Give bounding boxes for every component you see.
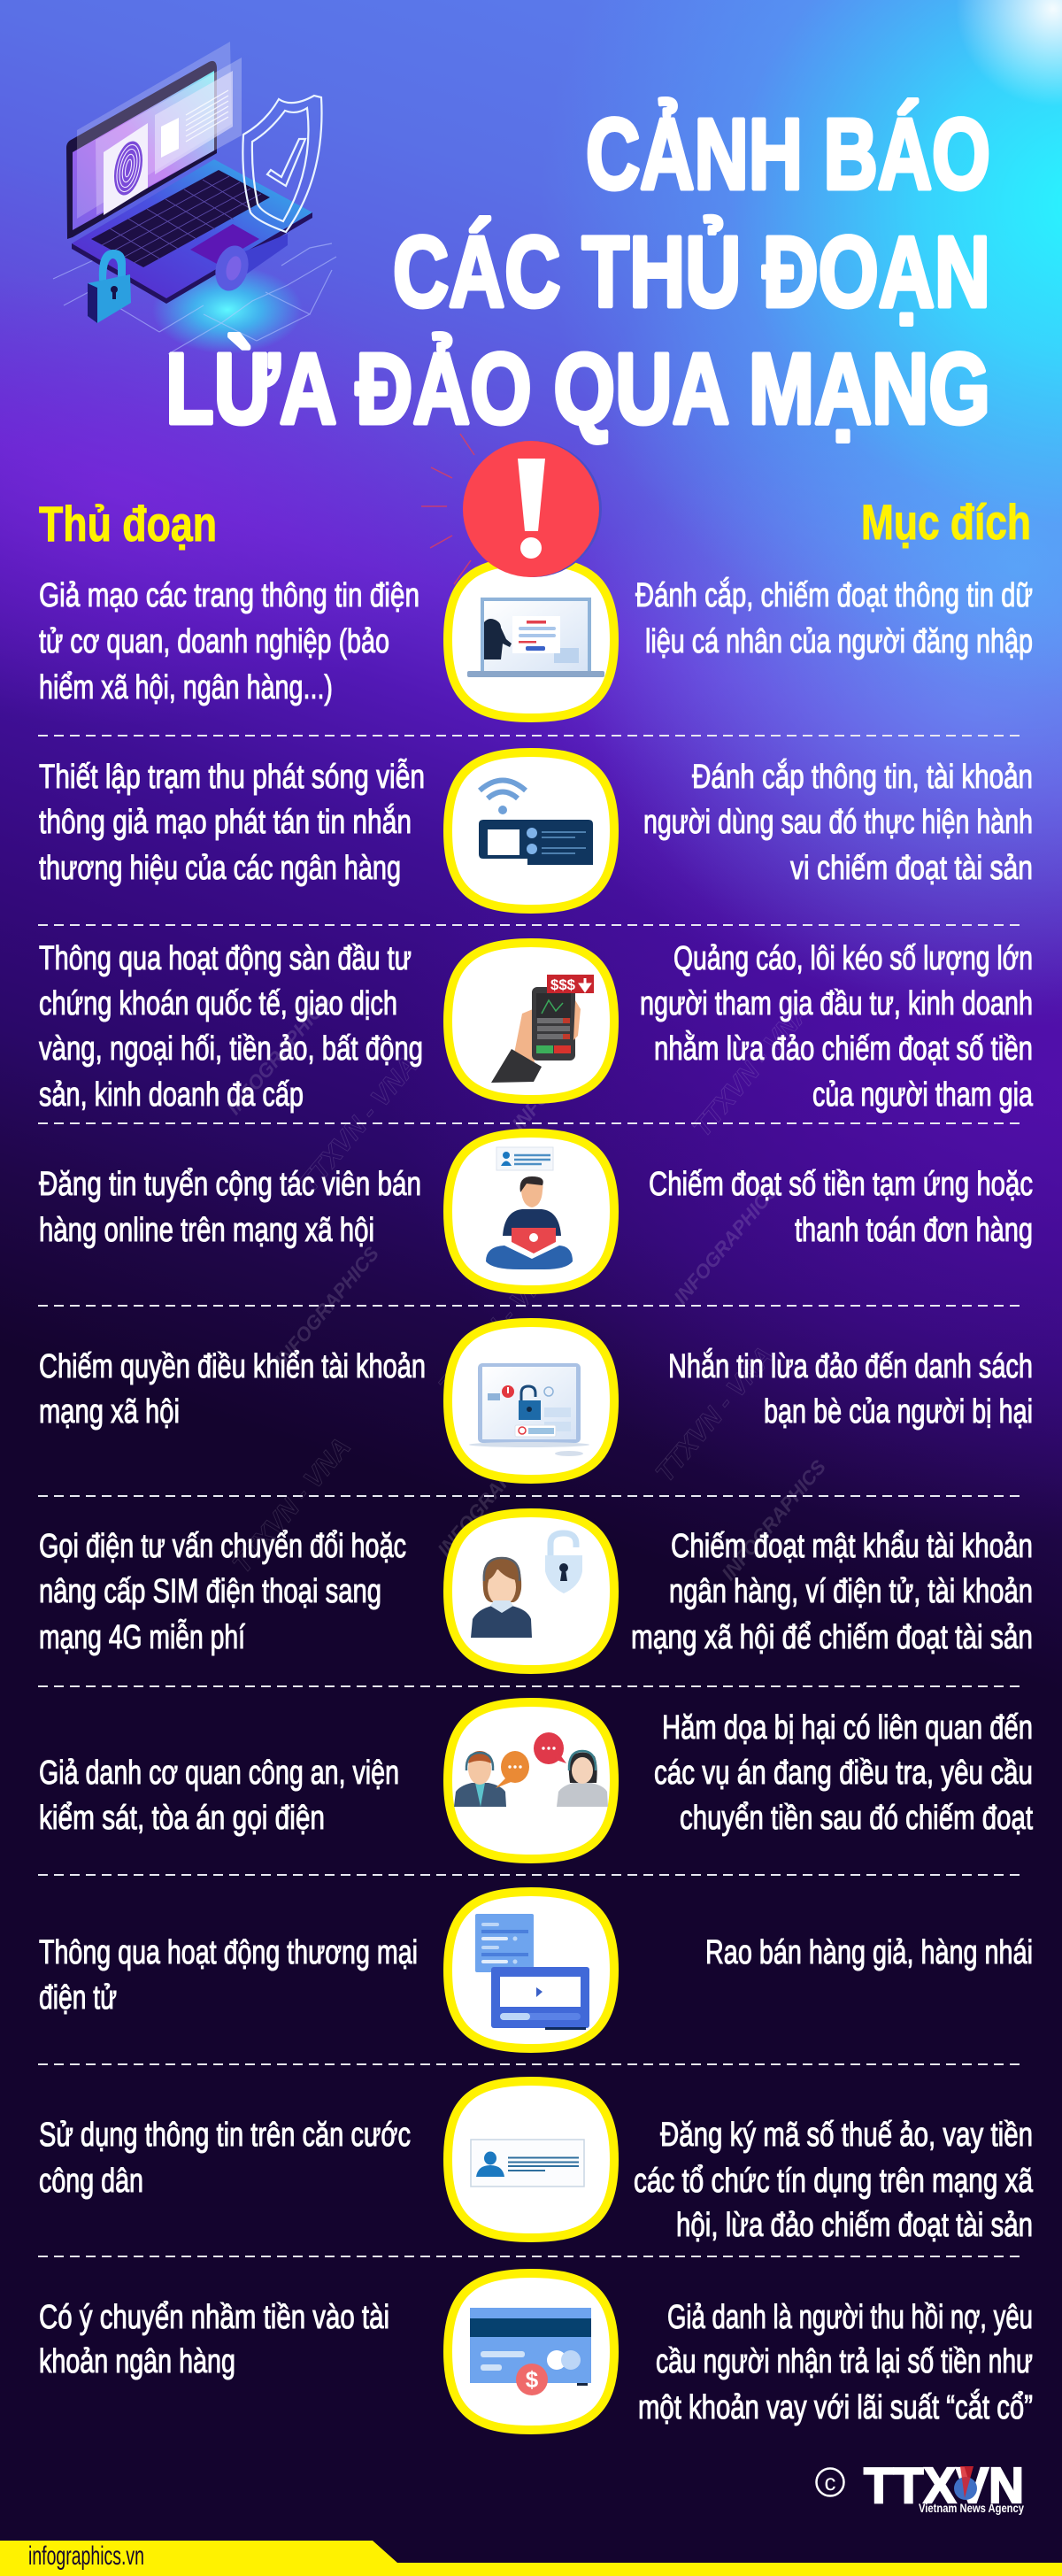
row 2 [39, 752, 1033, 909]
row 5 method [39, 1348, 426, 1431]
row 2 method: thông giả mạo phát tán tin nhắn [39, 803, 412, 841]
row 8 pill icon: e-commerce panels [448, 1892, 614, 2048]
row 8 method [39, 1934, 418, 2017]
logo: TTXVN: TTXVN [864, 2457, 1024, 2514]
row 1 purpose [635, 576, 1033, 660]
row 4 method: hàng online trên mạng xã hội [39, 1212, 374, 1249]
key [232, 234, 288, 276]
row 10 method [39, 2299, 389, 2380]
row 3 method: vàng, ngoại hối, tiền ảo, bất động [39, 1030, 423, 1068]
footer band: infographics.vn [28, 2541, 144, 2571]
row 4 method [39, 1166, 421, 1249]
row 10 pill icon: bank card with coin [448, 2273, 614, 2430]
row 9 method [39, 2117, 411, 2200]
row 1 pill icon: phishing login [448, 561, 614, 718]
watermarks: INFOGRAPHICS [270, 1242, 383, 1371]
watermarks: INFOGRAPHICS [222, 990, 335, 1119]
padlock [99, 250, 126, 282]
row 1 method: Giả mạo các trang thông tin điện [39, 577, 419, 614]
row 3 [39, 940, 1034, 1114]
trackpad [190, 224, 259, 264]
row 8 [39, 1892, 1033, 2048]
alert icon [421, 434, 602, 584]
watermarks: INFOGRAPHICS [669, 1179, 782, 1308]
row 2 purpose [643, 758, 1033, 887]
document [161, 118, 179, 158]
row 6 method: Gọi điện tư vấn chuyển đổi hoặc [39, 1528, 406, 1565]
row 2 method: Thiết lập trạm thu phát sóng viễn [39, 758, 425, 796]
laptop base [72, 159, 312, 298]
row 7 [39, 1702, 1033, 1859]
row 4 purpose [649, 1166, 1033, 1249]
row 3 purpose [640, 940, 1034, 1114]
logo: TTXVN: Vietnam News Agency [919, 2501, 1024, 2515]
watermarks: INFOGRAPHICS [717, 1455, 830, 1585]
row 4 [39, 1133, 1033, 1290]
row 10 pill icon: bank card with coin: $ [526, 2366, 539, 2393]
dashed dividers [38, 736, 1024, 2256]
row 6 method: mạng 4G miễn phí [39, 1618, 245, 1656]
row 10 [39, 2273, 1033, 2430]
illustration: laptop with security symbols [53, 42, 336, 354]
row 3 method [39, 940, 423, 1114]
shield [242, 96, 322, 232]
screen [66, 61, 217, 239]
row 2 pill icon: fake transmitter [448, 752, 614, 909]
row 3 method: chứng khoán quốc tế, giao dịch [39, 985, 397, 1022]
row 10 purpose [638, 2299, 1033, 2426]
watermarks: TTXVN - VNA [650, 1341, 780, 1488]
row 7 method [39, 1755, 399, 1837]
row 3 pill icon: hand with trading phone: $$$ [550, 976, 576, 993]
row 6 pill icon: operator and padlock [448, 1513, 614, 1670]
row 9 pill icon: ID card [448, 2081, 614, 2238]
fingerprint card [104, 123, 148, 215]
row 6 [39, 1513, 1033, 1670]
row 5 pill icon: tablet with open lock [448, 1323, 614, 1479]
row 1 method [39, 577, 419, 706]
row 6 purpose [631, 1528, 1033, 1656]
row 5 method: mạng xã hội [39, 1393, 180, 1431]
footer band [0, 2541, 1062, 2576]
row 1 method: tử cơ quan, doanh nghiệp (bảo [39, 623, 389, 660]
row 7 purpose [654, 1709, 1033, 1837]
row 3 pill icon: hand with trading phone [448, 943, 614, 1099]
row 10 method: Có ý chuyển nhầm tiền vào tài [39, 2299, 389, 2336]
row 9 method: công dân [39, 2163, 143, 2200]
row 4 pill icon: person with laptop [448, 1133, 614, 1290]
row 5 purpose [668, 1347, 1033, 1431]
row 9 [39, 2081, 1034, 2244]
row 6 method [39, 1528, 406, 1656]
row 6 method: nâng cấp SIM điện thoại sang [39, 1573, 381, 1610]
row 3 method: sản, kinh doanh đa cấp [39, 1076, 304, 1114]
row 9 method: Sử dụng thông tin trên căn cước [39, 2117, 411, 2154]
watermarks: INFOGRAPHICS [433, 1431, 546, 1561]
floating panes [77, 42, 232, 219]
row 2 method [39, 758, 425, 887]
row 2 method: thương hiệu của các ngân hàng [39, 850, 401, 887]
watermarks: TTXVN - VNA [688, 996, 817, 1143]
title [165, 98, 990, 444]
heading: Thủ đoạn: Thủ đoạn [39, 496, 217, 551]
row 8 method: Thông qua hoạt động thương mại [39, 1934, 418, 1971]
row 5 method: Chiếm quyền điều khiển tài khoản [39, 1348, 426, 1385]
watermarks: INFOGRAPHICS [507, 1006, 620, 1135]
row 5 [39, 1323, 1033, 1479]
watermarks [222, 990, 830, 1585]
row 1 method: hiểm xã hội, ngân hàng...) [39, 669, 333, 706]
row 4 method: Đăng tin tuyển cộng tác viên bán [39, 1166, 421, 1203]
row 7 method: kiểm sát, tòa án gọi điện [39, 1800, 325, 1837]
row 7 pill icon: two call agents [448, 1702, 614, 1859]
row 7 method: Giả danh cơ quan công an, viện [39, 1755, 399, 1792]
watermarks: TTXVN - VNA [295, 1051, 424, 1198]
logo: TTXVN: c [825, 2469, 835, 2495]
row 9 purpose [634, 2117, 1034, 2244]
watermarks: TTXVN - VNA [434, 1253, 563, 1400]
row 10 method: khoản ngân hàng [39, 2343, 235, 2380]
watermarks: TTXVN - VNA [227, 1432, 357, 1579]
row 1 [39, 561, 1033, 718]
row 8 method: điện tử [39, 1979, 117, 2017]
keyboard [91, 170, 270, 267]
row 3 method: Thông qua hoạt động sàn đầu tư [39, 940, 412, 977]
